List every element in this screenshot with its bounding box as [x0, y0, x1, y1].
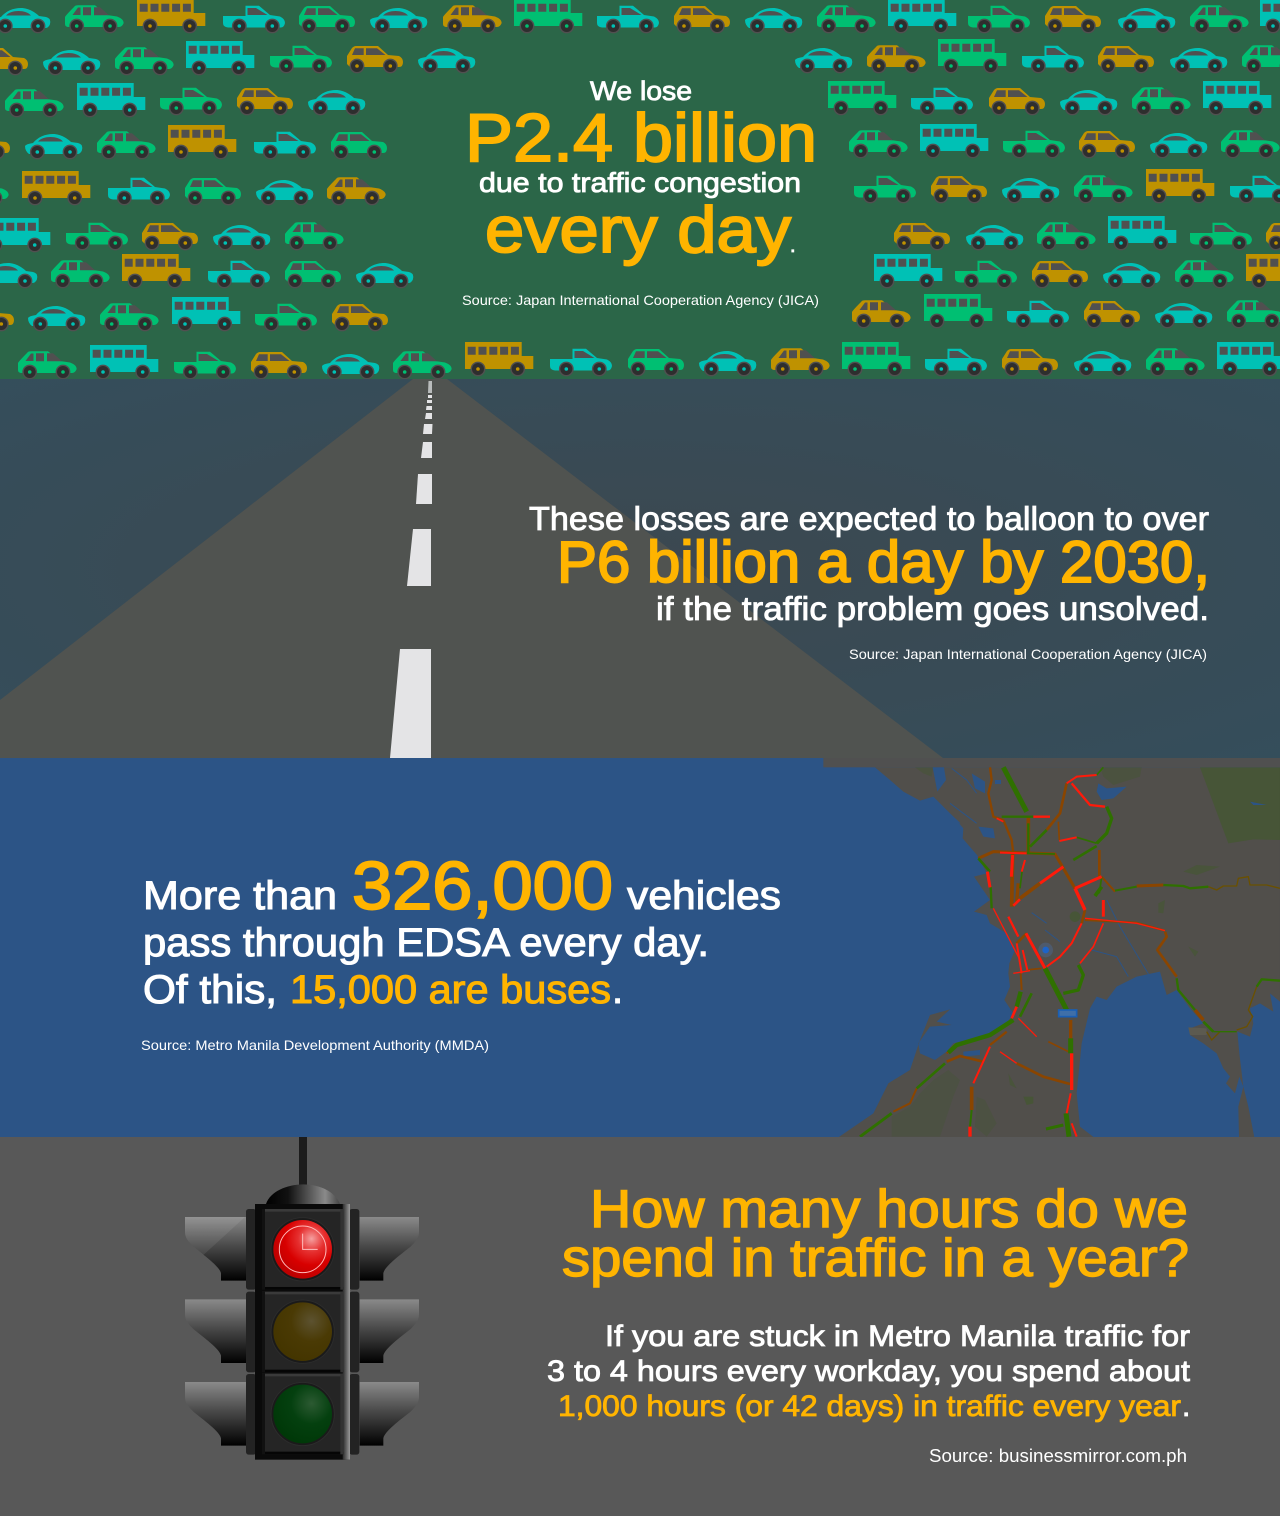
forest areas	[892, 767, 1280, 1137]
visors	[185, 1217, 419, 1446]
panel: traffic congestion losses	[0, 0, 1280, 380]
EDSA vehicle count text	[143, 848, 781, 1012]
vehicles row 1	[0, 0, 1280, 33]
heading: how many hours	[562, 1180, 1189, 1288]
source: MMDA: Source: Metro Manila Development Authority (MMDA)	[141, 1037, 489, 1053]
body text: 1,000 hours: 1,000 hours (or 42 days) in traffic every year	[558, 1390, 1181, 1423]
vehicles row 5	[0, 169, 1280, 205]
map label tag	[1059, 1010, 1077, 1017]
vehicle pattern	[0, 0, 1280, 379]
projection text: P6 billion a day by 2030,	[557, 530, 1210, 595]
red congested traffic	[970, 775, 1165, 1137]
vehicles row 2	[0, 39, 1280, 75]
panel: road and 2030 projection	[0, 379, 1280, 758]
traffic map of Metro Manila	[823, 758, 1280, 1137]
headline: we lose P2.4 billion: due to traffic congestion	[479, 167, 801, 198]
vehicles row 4	[0, 124, 1280, 159]
projection text	[529, 500, 1210, 627]
headline: we lose P2.4 billion: We lose	[590, 76, 692, 106]
housing	[255, 1204, 350, 1460]
headline: we lose P2.4 billion: .	[790, 235, 796, 257]
body text: 1,000 hours: .	[1182, 1390, 1190, 1423]
map location marker	[1038, 943, 1053, 957]
projection text: These losses are expected to balloon to over	[529, 500, 1209, 537]
panel: EDSA vehicles and map	[0, 758, 1280, 1137]
vehicles row 6	[0, 216, 1280, 252]
rivers	[937, 768, 1150, 977]
source: JICA: Source: Japan International Cooperation Agency (JICA)	[849, 646, 1207, 662]
brown moderate traffic	[893, 767, 1203, 1112]
EDSA vehicle count text: Of this,	[143, 968, 277, 1012]
red lens with clock	[271, 1217, 335, 1281]
EDSA vehicle count text: .	[612, 968, 623, 1012]
heading: how many hours: spend in traffic in a year?	[562, 1229, 1189, 1288]
inland water	[933, 767, 1267, 1057]
icon: traffic light with clock	[185, 1137, 419, 1460]
EDSA vehicle count text: 15,000 are buses	[290, 968, 611, 1012]
headline: we lose P2.4 billion: every day	[485, 193, 792, 266]
source: businessmirror: Source: businessmirror.com.ph	[929, 1446, 1187, 1466]
EDSA vehicle count text: vehicles	[627, 874, 781, 918]
green free-flowing traffic	[860, 767, 1280, 1137]
heading: how many hours: How many hours do we	[590, 1180, 1188, 1239]
EDSA vehicle count text: More than	[143, 874, 337, 918]
body text: 1,000 hours: If you are stuck in Metro Manila traffic for	[605, 1320, 1190, 1353]
amber lens	[271, 1300, 335, 1364]
headline: we lose P2.4 billion	[465, 76, 817, 266]
road dashes	[390, 381, 432, 758]
EDSA vehicle count text: 326,000	[352, 848, 613, 924]
EDSA vehicle count text: pass through EDSA every day.	[143, 921, 709, 965]
body text: 1,000 hours	[547, 1320, 1191, 1423]
road traffic lines	[860, 767, 1280, 1137]
body text: 1,000 hours: 3 to 4 hours every workday, you spend about	[547, 1355, 1191, 1388]
vehicles row 9	[18, 342, 1280, 379]
land	[838, 767, 1280, 1137]
headline: we lose P2.4 billion: P2.4 billion	[465, 100, 817, 176]
source: JICA: Source: Japan International Cooperation Agency (JICA)	[462, 292, 819, 308]
road	[0, 379, 943, 758]
vehicles row 3	[5, 81, 1271, 117]
vehicles row 8	[0, 294, 1280, 331]
dark ochre light lines	[1207, 877, 1280, 1040]
projection text: if the traffic problem goes unsolved.	[656, 590, 1209, 627]
panel: hours spent in traffic	[0, 1137, 1280, 1516]
side plates	[246, 1209, 359, 1455]
green lens	[271, 1382, 335, 1446]
vehicles row 7	[0, 254, 1280, 288]
